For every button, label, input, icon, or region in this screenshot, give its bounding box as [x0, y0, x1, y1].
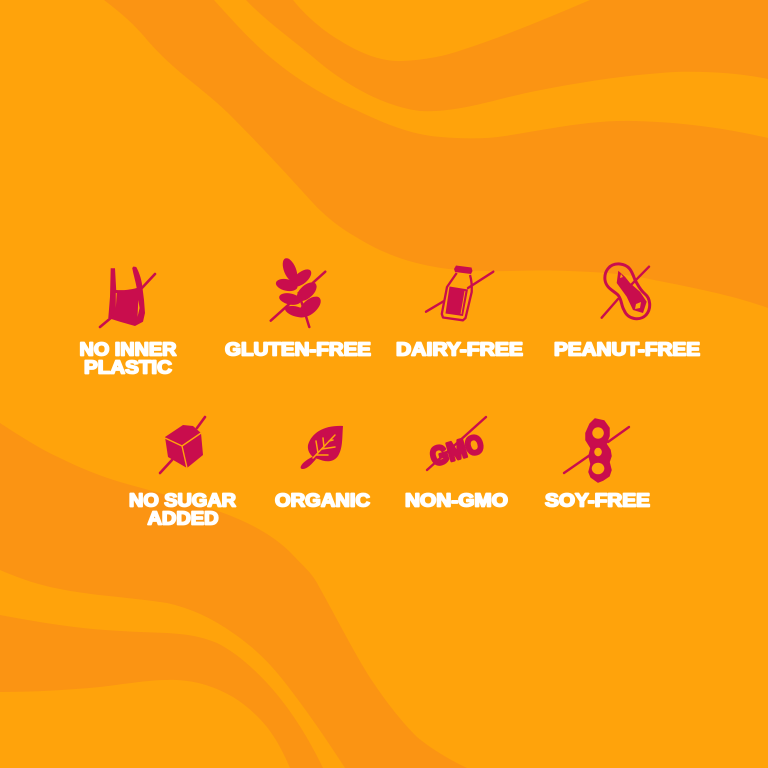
background wave: top: [104, 0, 768, 308]
icon: no soy pod: [564, 419, 629, 482]
icon: no peanut: [602, 264, 650, 319]
icon: no plastic bag: [100, 266, 155, 327]
icon: no sugar cube: [160, 417, 205, 473]
label: non-gmo: NON-GMO: [405, 490, 508, 510]
label: soy-free: SOY-FREE: [545, 490, 650, 510]
background wave: bottom: [0, 423, 467, 768]
icon: no GMO: GMO: [427, 428, 487, 472]
label: gluten-free: GLUTEN-FREE: [225, 340, 371, 360]
label: no sugar added: ADDED: [148, 508, 218, 528]
label: no inner plastic: NO INNER: [80, 340, 176, 360]
label: dairy-free: DAIRY-FREE: [396, 340, 523, 360]
label: no inner plastic: [80, 340, 176, 378]
icon: no dairy bottle: [426, 266, 493, 320]
icon: no gluten wheat: [271, 256, 325, 327]
icon: organic leaf: [301, 426, 343, 469]
label: no sugar added: NO SUGAR: [129, 490, 236, 510]
label: no sugar added: [129, 490, 236, 528]
label: no inner plastic: PLASTIC: [84, 358, 172, 378]
label: organic: ORGANIC: [275, 490, 370, 510]
label: peanut-free: PEANUT-FREE: [554, 340, 700, 360]
